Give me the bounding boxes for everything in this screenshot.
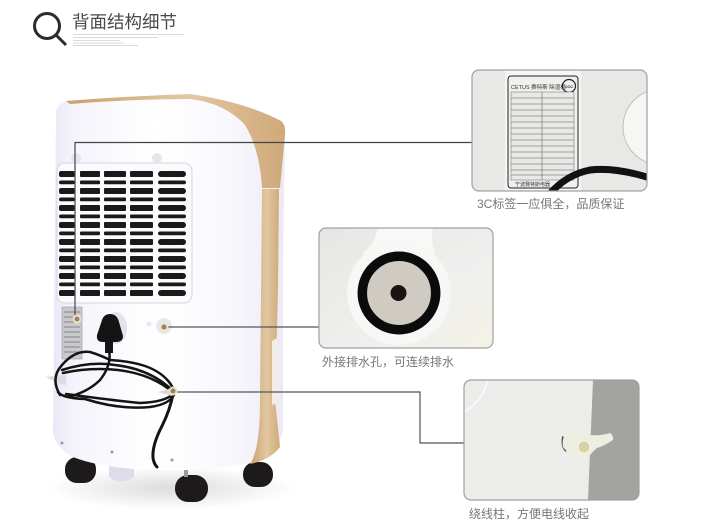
label sheet: 宁波赛特斯电器 (515, 181, 550, 188)
panel: 3C label photo (471, 69, 648, 192)
seam screws (60, 442, 174, 462)
grille panel (57, 163, 192, 303)
handle recess (272, 338, 277, 405)
marker dot: 3C label (74, 316, 80, 322)
cord post (563, 430, 613, 459)
marker dot: cord post (170, 388, 176, 394)
post opening (578, 441, 590, 453)
label sheet: CCC (564, 84, 573, 89)
connector line: cord post (173, 392, 464, 443)
rating sticker (62, 307, 82, 359)
corner arc (464, 380, 488, 412)
black power cable (548, 169, 650, 196)
panel: drain hole photo (319, 228, 493, 348)
drain stub (109, 460, 134, 482)
grey side surface (588, 380, 640, 500)
label sheet (508, 76, 578, 188)
body shell (53, 95, 285, 470)
power plug (97, 314, 123, 342)
socket recess (105, 312, 127, 344)
dehumidifier rear view (45, 94, 295, 510)
label sheet: CETUS 赛特斯 除湿机 (511, 83, 566, 91)
fitting neck (362, 228, 436, 254)
drain hole (390, 285, 406, 301)
black ring (362, 256, 436, 330)
floor shadow (45, 466, 295, 510)
power cord (55, 350, 175, 467)
caption: cord post: 绕线柱，方便电线收起 (469, 506, 589, 521)
panel: cord post photo (464, 380, 640, 500)
fitting halo (347, 254, 451, 345)
drain fitting (146, 318, 172, 334)
title: 背面结构细节 (72, 12, 177, 32)
plug neck (105, 341, 113, 353)
winding peg (158, 388, 172, 396)
icon: magnifying glass (34, 14, 66, 45)
marker dot: drain hole (160, 324, 168, 330)
title fine print (73, 34, 184, 46)
caption: drain hole: 外接排水孔，可连续排水 (322, 354, 454, 369)
connector line: 3C label (75, 142, 472, 318)
grille slots (59, 171, 186, 296)
gold trim: upper (66, 94, 285, 188)
gold trim: lower (250, 189, 280, 464)
left cord peg (45, 375, 66, 385)
casters (65, 457, 273, 502)
connector line: drain hole (166, 326, 320, 328)
grille mount tabs (71, 153, 162, 163)
caption: 3C label: 3C标签一应俱全，品质保证 (477, 196, 624, 211)
post shadow (562, 436, 566, 452)
appliance round recess (622, 92, 646, 162)
